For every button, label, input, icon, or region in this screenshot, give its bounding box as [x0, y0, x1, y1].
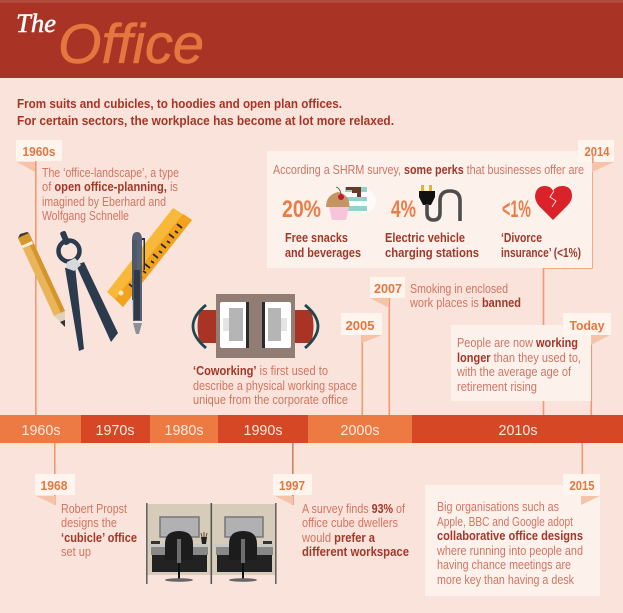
label: free snacks	[285, 231, 361, 260]
decade labels: 1980s	[164, 422, 204, 439]
icon: cubicles	[146, 503, 277, 584]
text: open office-planning: The ‘office-landscape’, a type	[42, 166, 179, 180]
intro text	[17, 96, 394, 128]
icon: pen	[132, 232, 145, 334]
icon: drawing tools	[18, 208, 192, 351]
decade labels: 2000s	[340, 422, 380, 439]
text: working longer: People are now working	[457, 336, 578, 350]
text: coworking: describe a physical working space	[193, 379, 357, 393]
text: survey: office cube dwellers	[302, 516, 398, 530]
intro text: For certain sectors, the workplace has become at lot more relaxed.	[17, 113, 394, 128]
text: cubicle: ‘cubicle’ office	[61, 531, 137, 545]
label: electric vehicle: charging stations	[385, 246, 479, 260]
icon: coworking desk	[193, 294, 318, 358]
label: free snacks: Free snacks	[285, 231, 348, 245]
text: coworking: ‘Coworking’ is first used to	[193, 364, 328, 378]
text: cubicle: designs the	[61, 516, 117, 530]
icon: broken heart	[535, 186, 572, 220]
text: cubicle: set up	[61, 545, 91, 559]
perk: electric vehicle charging	[385, 185, 479, 260]
label: free snacks: and beverages	[285, 246, 361, 260]
text: survey: A survey finds 93% of	[302, 502, 405, 516]
text: collaborative designs: having chance meetings are	[437, 558, 571, 572]
text: collaborative designs: Big organisations such as	[437, 500, 559, 514]
title: The	[16, 9, 56, 38]
text: smoking banned: Smoking in enclosed	[410, 282, 508, 296]
text: collaborative designs: Apple, BBC and Google adopt	[437, 515, 573, 529]
text: collaborative designs: where running into people and	[436, 544, 583, 558]
text: coworking: unique from the corporate office	[193, 393, 348, 407]
1997 event: 1997	[279, 478, 305, 493]
perk: free snacks	[282, 187, 376, 260]
label: divorce insurance: ‘Divorce	[501, 231, 542, 245]
1960s event	[16, 140, 179, 415]
text: smoking banned	[409, 282, 521, 310]
perk: electric vehicle charging: 4%	[391, 196, 416, 223]
decade labels	[22, 422, 538, 439]
text: coworking	[193, 364, 357, 407]
1960s event: 1960s	[22, 144, 56, 159]
decade labels: 1960s	[22, 422, 60, 439]
2005 event	[341, 313, 382, 415]
text: open office-planning	[42, 166, 179, 223]
text: survey	[301, 502, 409, 559]
tag: 1960s	[16, 140, 62, 161]
label: electric vehicle: Electric vehicle	[385, 231, 465, 245]
2007 event	[370, 277, 521, 415]
2007 event: 2007	[374, 281, 402, 296]
perk: divorce insurance	[501, 186, 581, 260]
text: working longer: with the average age of	[456, 365, 571, 379]
perk: divorce insurance: <1%	[502, 196, 531, 223]
text: collaborative designs: more key than having a desk	[437, 573, 575, 587]
decade labels: 2010s	[498, 422, 538, 439]
text: open office-planning: imagined by Eberhard and	[42, 195, 166, 209]
1968 event	[35, 443, 137, 559]
2014 tag	[578, 140, 614, 172]
text: cubicle: Robert Propst	[61, 502, 127, 516]
decade labels: 1970s	[96, 422, 134, 439]
panel: today	[451, 313, 611, 415]
icon: compass	[58, 230, 118, 351]
panel: 2015: 2015	[570, 478, 594, 493]
tag: 2015	[563, 474, 600, 495]
timeline bar	[0, 415, 623, 443]
text: cubicle	[61, 502, 137, 559]
text: open office-planning: of open office-planning, is	[42, 180, 178, 194]
icon: pencil	[18, 232, 65, 327]
perk: free snacks: 20%	[282, 196, 321, 223]
text: open office-planning: Wolfgang Schnelle	[42, 209, 129, 223]
text: survey: different workspace	[302, 545, 409, 559]
header banner	[0, 0, 623, 78]
text: working longer: retirement rising	[457, 380, 537, 394]
1968 event: 1968	[40, 478, 68, 493]
panel: today: Today	[570, 318, 605, 333]
2005 event: 2005	[346, 318, 374, 333]
icon: ruler	[107, 208, 192, 307]
1997 event	[273, 443, 409, 559]
text: working longer	[456, 336, 581, 394]
label: electric vehicle	[385, 231, 479, 260]
text: smoking banned: work places is banned	[409, 296, 521, 310]
title: Office	[58, 12, 204, 75]
icon: plug	[419, 185, 460, 221]
text: collaborative designs: collaborative office designs	[437, 529, 583, 543]
tag: today	[563, 313, 611, 335]
perks intro: According a SHRM survey, some perks that businesses offer are	[273, 163, 584, 177]
intro text: From suits and cubicles, to hoodies and open plan offices.	[17, 96, 342, 111]
label: divorce insurance	[501, 231, 581, 260]
icon: cupcake and cake	[326, 187, 376, 220]
text: collaborative designs	[436, 500, 583, 587]
text: survey: would prefer a	[301, 531, 376, 545]
panel: 2015	[425, 443, 600, 596]
connector: 2014 line	[544, 162, 592, 415]
decade labels: 1990s	[244, 422, 282, 439]
panel: perks	[267, 151, 592, 268]
2014 tag: 2014	[584, 144, 610, 159]
text: working longer: longer than they used to,	[457, 351, 581, 365]
label: divorce insurance: insurance’ (<1%)	[501, 246, 581, 260]
